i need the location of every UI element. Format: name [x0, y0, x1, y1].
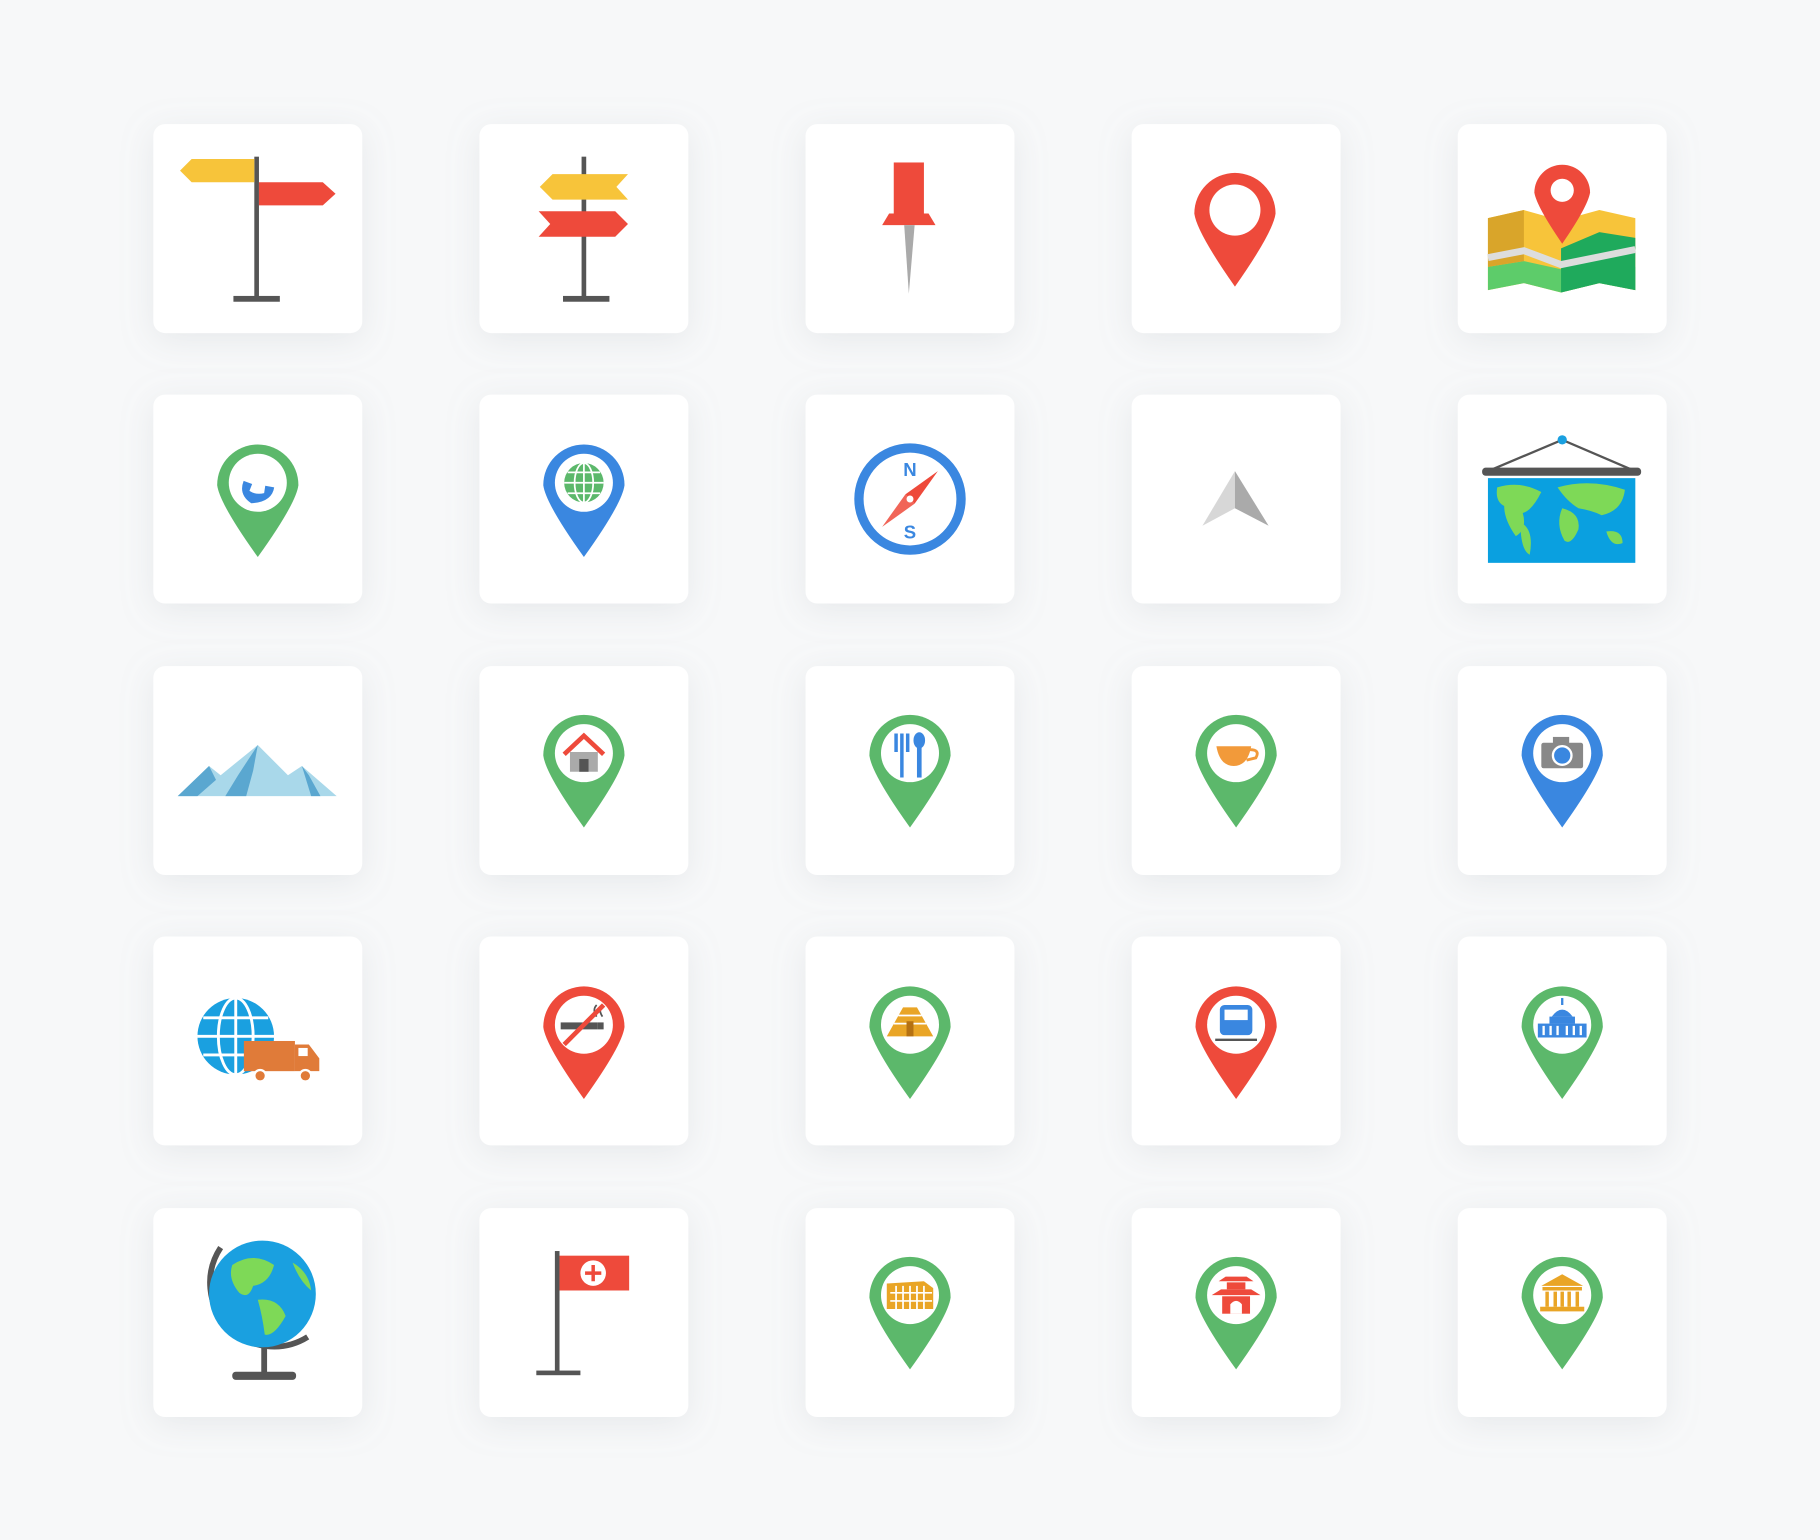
icon: bank pin	[1522, 1257, 1603, 1369]
icon: push pin	[882, 162, 936, 294]
icon: mountains	[178, 745, 337, 796]
icon: home pin	[543, 715, 625, 827]
icon: colosseum pin	[869, 1257, 951, 1369]
icon: capitol pin	[1522, 986, 1603, 1099]
icon: navigation arrow	[1202, 471, 1269, 526]
icon: train pin	[1195, 986, 1277, 1099]
icon: restaurant pin	[869, 715, 951, 827]
icon: no smoking pin	[543, 986, 625, 1099]
icon: pagoda pin	[1195, 1257, 1277, 1369]
icon: compass	[859, 448, 961, 550]
icon: signpost one	[180, 157, 336, 302]
icon: coffee pin	[1195, 715, 1277, 827]
icon: compass: S	[904, 521, 916, 542]
icon: camera pin	[1522, 715, 1603, 827]
icon: first aid flag	[536, 1251, 629, 1375]
icon: pyramid pin	[869, 986, 951, 1099]
icon: globe with truck	[197, 998, 319, 1082]
icon: world map	[1482, 435, 1641, 563]
icon: globe pin	[543, 444, 625, 557]
icon: folded map	[1488, 165, 1635, 292]
icon: phone pin	[217, 444, 298, 557]
icon: desk globe	[209, 1241, 316, 1380]
card grid	[153, 124, 1667, 1417]
icon: red pin	[1194, 173, 1276, 287]
icon: compass: N	[903, 459, 917, 480]
icon: signpost two	[539, 157, 628, 302]
